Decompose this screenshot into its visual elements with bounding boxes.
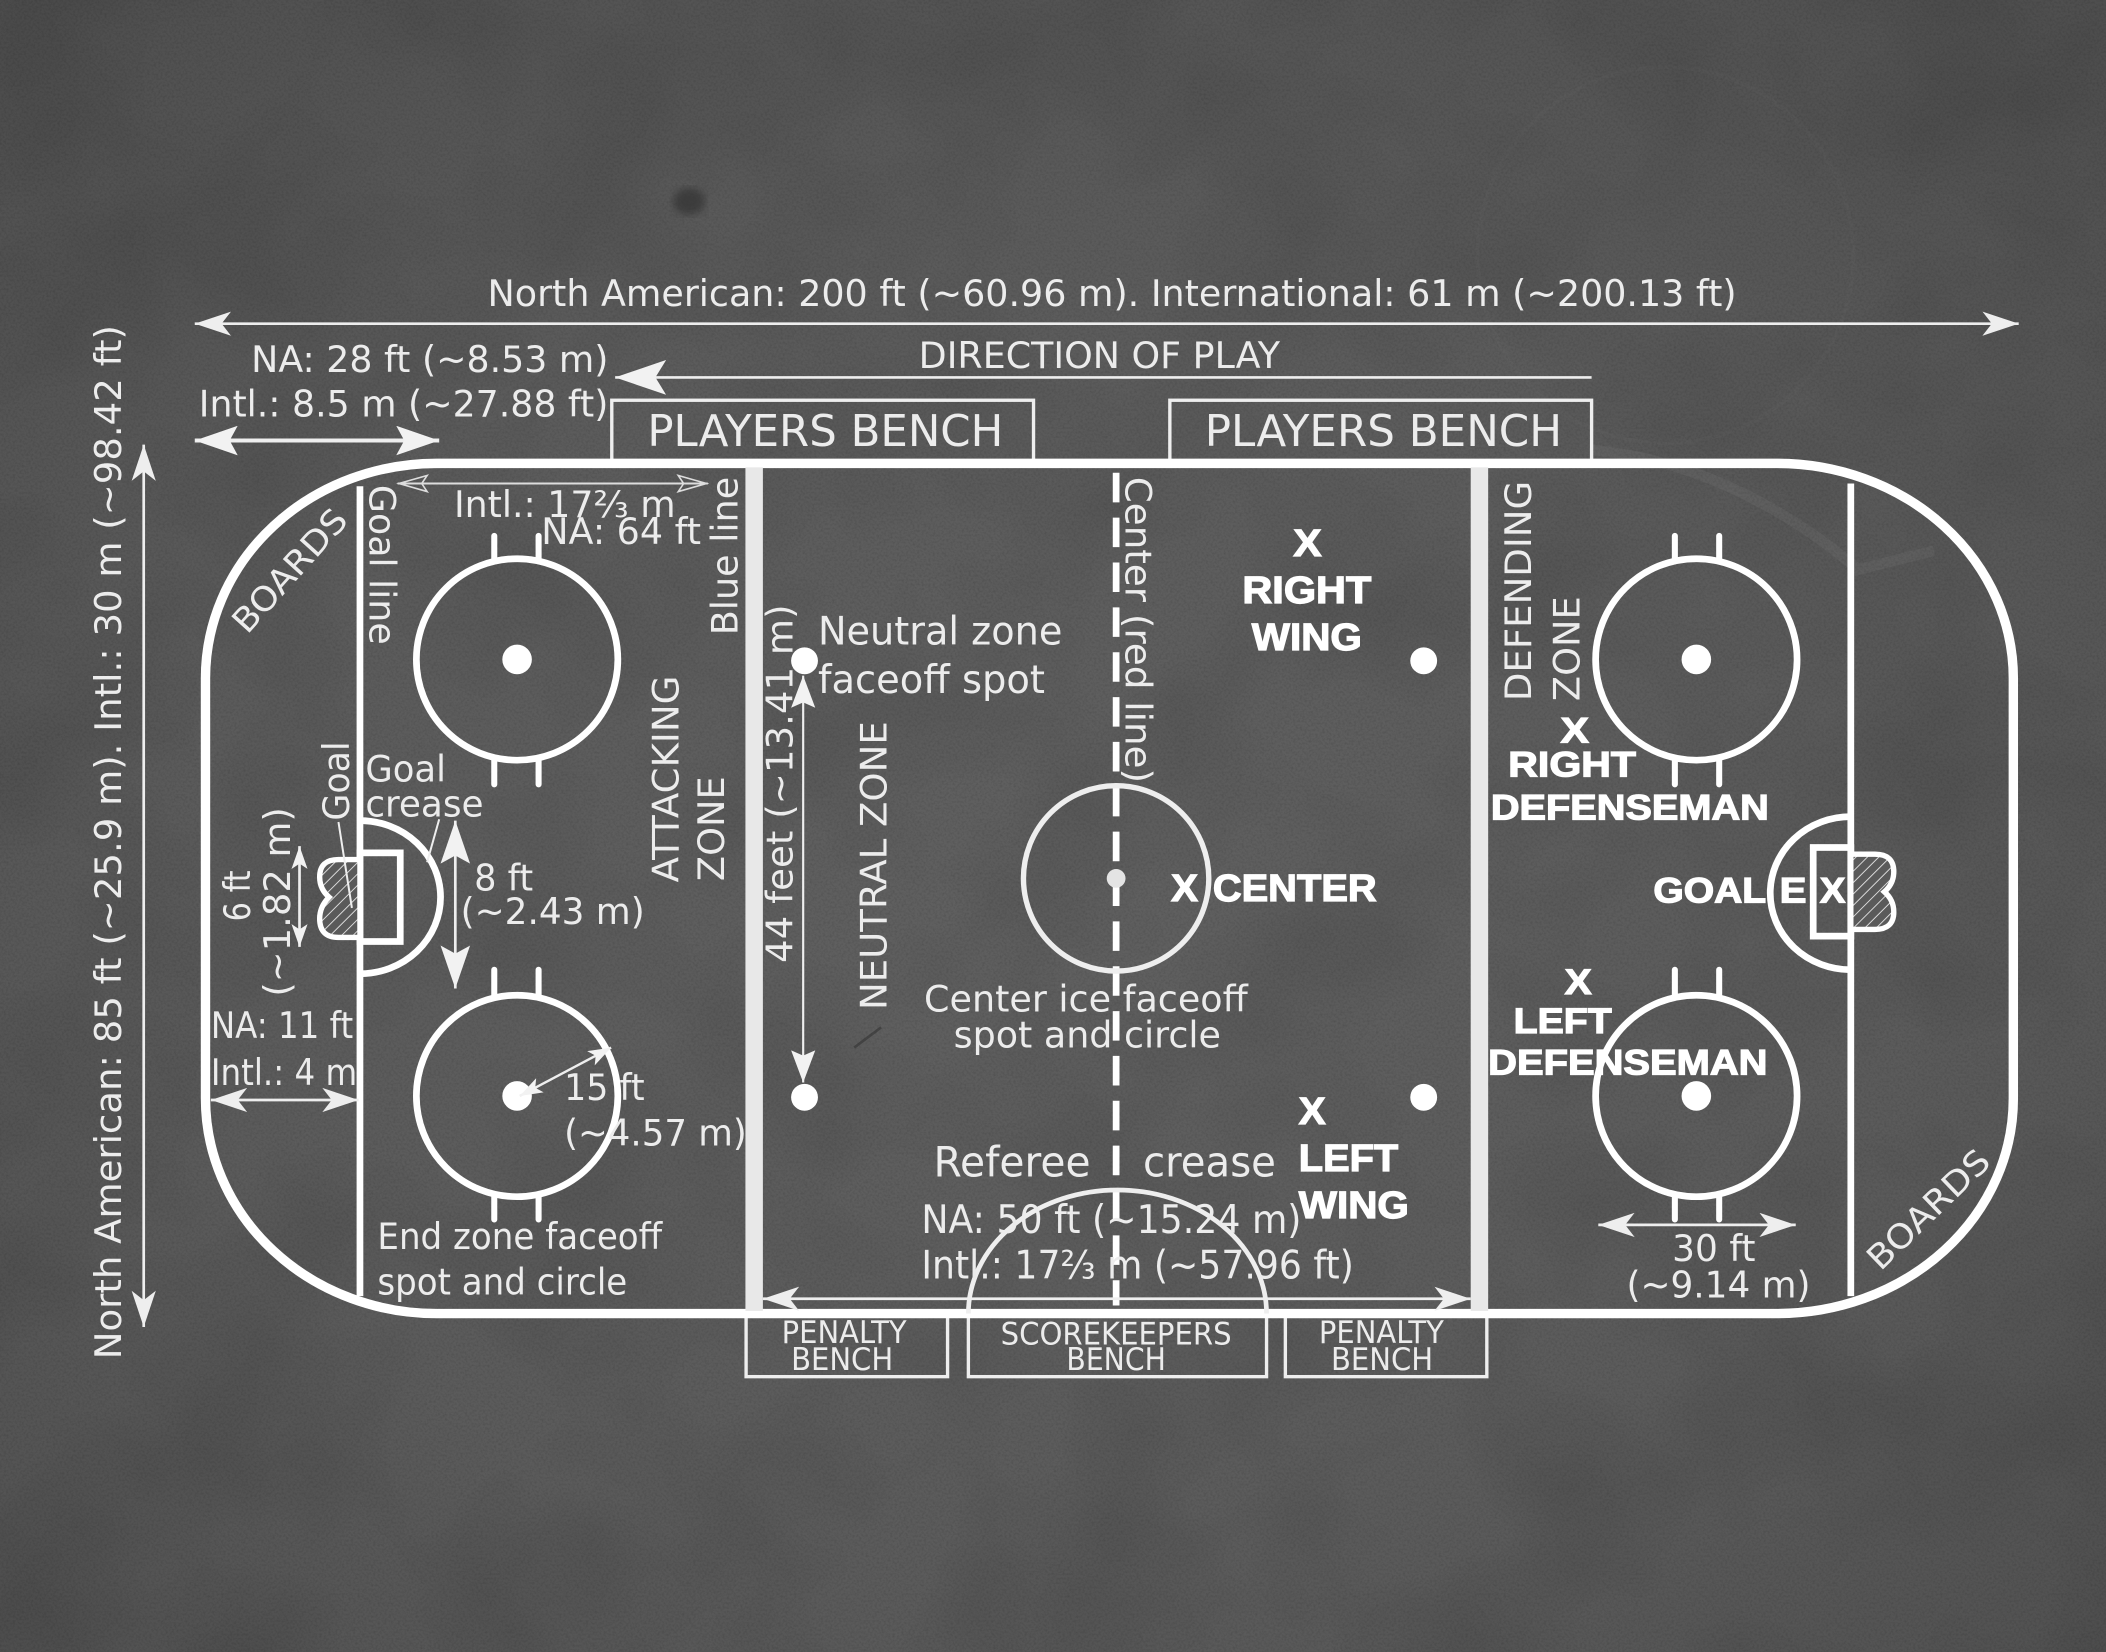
boards label right: BOARDS bbox=[1859, 1141, 1998, 1278]
right goal and crease bbox=[1770, 817, 1894, 970]
player: right defenseman: DEFENSEMAN bbox=[1491, 788, 1769, 827]
end zone distance dimension: Intl.: 17⅔ m bbox=[454, 483, 676, 526]
player: right defenseman: X bbox=[1561, 712, 1589, 751]
player: right wing: X bbox=[1293, 522, 1322, 564]
defending zone label: DEFENDING bbox=[1497, 481, 1540, 701]
faceoff hash spacing dimension: 30 ft bbox=[1672, 1227, 1755, 1270]
penalty bench right: BENCH bbox=[1331, 1342, 1433, 1378]
center ice faceoff label bbox=[924, 977, 1249, 1057]
neutral zone faceoff spot label: Neutral zone bbox=[818, 610, 1062, 655]
player: left wing: X bbox=[1299, 1090, 1326, 1132]
scorekeepers bench: SCOREKEEPERS bbox=[1001, 1316, 1232, 1352]
attacking zone label: ATTACKING bbox=[644, 676, 687, 882]
player: goalie bbox=[1653, 872, 1845, 911]
goal line label: Goal line bbox=[360, 485, 403, 645]
player: right wing: RIGHT bbox=[1242, 569, 1371, 611]
neutral zone width dimension: 44 feet (~13.41 m) bbox=[758, 604, 801, 963]
goal line to boards dimension bbox=[211, 1004, 359, 1100]
player: left defenseman: X bbox=[1565, 963, 1592, 1002]
end zone faceoff label: End zone faceoff bbox=[377, 1215, 664, 1258]
player: left defenseman: LEFT bbox=[1514, 1002, 1612, 1041]
player: right wing bbox=[1242, 522, 1371, 658]
rink bbox=[205, 463, 2013, 1314]
corner radius dimension: Intl.: 8.5 m (~27.88 ft) bbox=[199, 382, 608, 425]
crease width dimension: 8 ft bbox=[474, 856, 533, 899]
boards label left: BOARDS bbox=[224, 501, 356, 641]
blue line to blue line dimension bbox=[763, 1298, 1471, 1300]
end zone distance dimension: NA: 64 ft bbox=[541, 510, 701, 553]
player: left defenseman: DEFENSEMAN bbox=[1488, 1043, 1768, 1082]
boards outline bbox=[205, 463, 2013, 1314]
player: left wing: WING bbox=[1299, 1184, 1409, 1226]
end zone faceoff circle: bottom left bbox=[416, 970, 618, 1220]
end zone faceoff label: spot and circle bbox=[377, 1261, 627, 1304]
player: right wing: WING bbox=[1252, 616, 1362, 658]
player: goalie: E bbox=[1780, 872, 1806, 911]
goal width dimension: (~1.82 m) bbox=[256, 807, 299, 997]
players bench left: PLAYERS BENCH bbox=[647, 406, 1003, 457]
center red line label: Center (red line) bbox=[1117, 477, 1160, 783]
corner radius dimension: NA: 28 ft (~8.53 m) bbox=[251, 338, 608, 381]
direction of play: DIRECTION OF PLAY bbox=[919, 334, 1280, 377]
referee crease bbox=[968, 1190, 1267, 1314]
neutral zone faceoff spot label: faceoff spot bbox=[818, 658, 1045, 703]
left goal and crease bbox=[320, 821, 441, 974]
crease width dimension: (~2.43 m) bbox=[461, 890, 645, 933]
center red line bbox=[1114, 473, 1119, 1305]
center ice faceoff label: spot and circle bbox=[954, 1014, 1221, 1057]
referee crease label: NA: 50 ft (~15.24 m) bbox=[921, 1198, 1301, 1243]
player: left wing: LEFT bbox=[1299, 1137, 1398, 1179]
player: goalie: GOAL bbox=[1653, 872, 1766, 911]
player: right defenseman bbox=[1491, 712, 1769, 827]
neutral zone label: NEUTRAL ZONE bbox=[852, 721, 895, 1010]
goal label: Goal bbox=[315, 741, 358, 821]
penalty bench left bbox=[746, 1315, 948, 1378]
defending zone label: ZONE bbox=[1545, 596, 1589, 701]
neutral zone faceoff spots bbox=[791, 647, 1437, 1111]
center ice faceoff label: Center ice faceoff bbox=[924, 977, 1249, 1020]
goal width dimension: 6 ft bbox=[216, 870, 259, 921]
overall width dimension: North American: 85 ft (~25.9 m). Intl.: 30 m (~98.42 ft) bbox=[87, 325, 130, 1359]
player: left wing bbox=[1299, 1090, 1409, 1226]
goal crease label bbox=[365, 748, 484, 862]
goal line to boards dimension: NA: 11 ft bbox=[211, 1004, 353, 1047]
faceoff hash spacing dimension: (~9.14 m) bbox=[1627, 1263, 1811, 1306]
penalty bench left: BENCH bbox=[791, 1342, 893, 1378]
center ice faceoff circle bbox=[1023, 786, 1209, 971]
penalty bench right bbox=[1285, 1315, 1487, 1378]
goal width dimension bbox=[216, 807, 300, 997]
end zone faceoff circle: bottom right bbox=[1596, 970, 1797, 1220]
end zone distance dimension bbox=[398, 483, 708, 553]
referee crease label bbox=[921, 1138, 1354, 1289]
referee crease label: Referee bbox=[933, 1138, 1091, 1187]
referee crease label: crease bbox=[1143, 1138, 1276, 1187]
faceoff hash spacing dimension bbox=[1598, 1225, 1811, 1306]
goal crease label: Goal bbox=[365, 748, 446, 791]
player: center: X bbox=[1171, 867, 1198, 909]
end zone faceoff circle: top right bbox=[1596, 536, 1797, 784]
overall length dimension: North American: 200 ft (~60.96 m). International: 61 m (~200.13 ft) bbox=[488, 272, 1737, 315]
blue line label: Blue line bbox=[703, 477, 746, 635]
attacking zone label: ZONE bbox=[690, 776, 733, 881]
player: right defenseman: RIGHT bbox=[1508, 745, 1636, 784]
faceoff circle radius dimension: (~4.57 m) bbox=[564, 1112, 747, 1155]
faceoff circle radius dimension bbox=[520, 1048, 747, 1155]
goal label bbox=[315, 741, 358, 908]
goal lines bbox=[360, 484, 1851, 1296]
scorekeepers bench: BENCH bbox=[1066, 1342, 1166, 1378]
attacking zone label bbox=[644, 676, 733, 882]
neutral zone faceoff spot label bbox=[818, 610, 1062, 703]
penalty bench right: PENALTY bbox=[1319, 1315, 1444, 1351]
defending zone label bbox=[1497, 481, 1589, 701]
end zone faceoff label bbox=[377, 1215, 664, 1304]
faceoff circle radius dimension: 15 ft bbox=[564, 1066, 645, 1109]
referee crease label: Intl.: 17⅔ m (~57.96 ft) bbox=[921, 1244, 1354, 1289]
goal line to boards dimension: Intl.: 4 m bbox=[211, 1051, 357, 1094]
corner radius dimension bbox=[195, 338, 608, 441]
goal crease label: crease bbox=[365, 783, 484, 826]
scorekeepers bench bbox=[968, 1316, 1267, 1378]
crease width dimension bbox=[455, 821, 645, 989]
player: goalie: X bbox=[1820, 872, 1845, 911]
blue lines bbox=[754, 467, 1479, 1311]
player: center: CENTER bbox=[1213, 867, 1377, 909]
players bench right: PLAYERS BENCH bbox=[1205, 406, 1562, 457]
end zone faceoff circle: top left bbox=[416, 536, 618, 784]
penalty bench left: PENALTY bbox=[782, 1315, 907, 1351]
player: left defenseman bbox=[1488, 963, 1768, 1082]
